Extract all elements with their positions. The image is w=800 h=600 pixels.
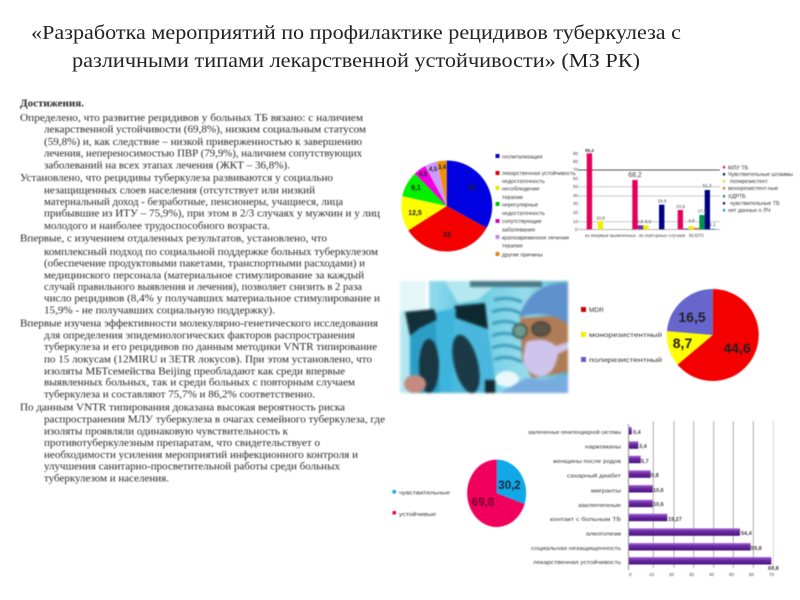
axis ticks: 50 — [729, 572, 735, 577]
paragraph: relapse factors — [20, 113, 366, 171]
bar chart: relapse groups: 10,8 — [596, 216, 605, 220]
bar chart: relapse groups: 10 — [573, 219, 579, 224]
bar chart: relapse groups: 20 — [573, 210, 579, 215]
axis ticks: 30 — [689, 572, 695, 577]
film: left dark band — [405, 309, 438, 336]
paragraph: molecular genetic study: выявленных больных, так и среди больных с повторным случаем — [44, 378, 355, 389]
category labels: социальная незащищенность — [531, 546, 621, 552]
paragraph: molecular genetic study — [20, 319, 378, 400]
text block: achievements — [20, 98, 385, 485]
pie chart: causes: 33 — [443, 232, 451, 239]
photo: doctor examining chest x-ray — [400, 281, 568, 396]
film: center spine — [436, 308, 456, 393]
axis ticks: 60 — [749, 572, 755, 577]
bar chart: relapse groups: 89,4 — [585, 148, 594, 153]
category labels: заключенные пенитенциарной системы — [528, 429, 621, 436]
bar chart: relapse groups: 17,9 — [698, 208, 707, 214]
bar chart: relapse groups: 4,8 — [688, 218, 695, 223]
legend: causes: заболевания — [502, 228, 535, 234]
hand — [404, 375, 426, 393]
legend: resistance types: полирезистентный — [589, 356, 662, 364]
paragraph: relapse factors: Определено, что развитие рецидивов у больных ТБ вязано: с наличием — [20, 113, 363, 124]
paragraph: social groups — [20, 173, 380, 232]
bar chart: relapse groups: из впервые выявленных — [585, 233, 637, 238]
axis ticks: 0 — [629, 572, 632, 577]
paragraph: social support: комплексный подход по социальной поддержке больных туберкулезом — [44, 247, 378, 258]
bars — [629, 427, 771, 564]
left lung — [419, 339, 439, 393]
paragraph: social support: случай правильного выявления и лечения), позволяет снизить в 2 раза — [44, 282, 362, 293]
legend: relapse groups: монорезистент-ные — [728, 186, 778, 192]
doctor face — [520, 315, 568, 378]
value labels: 59,8 — [751, 546, 762, 552]
value labels: 5,7 — [641, 459, 649, 465]
legend: causes: нерегулярные — [502, 202, 538, 208]
legend: causes: другие причины — [502, 252, 543, 258]
pie chart: drug resistance share: 69,8 — [472, 497, 495, 509]
paragraph: social support: Впервые, с изучением отдаленных результатов, установлено, что — [20, 234, 327, 245]
film: side tissue — [410, 320, 440, 393]
bar chart: relapse groups: из повторных случаев — [639, 233, 686, 238]
legend: drug resistance share: устойчивые — [399, 511, 436, 518]
pie chart: causes — [401, 160, 492, 252]
value labels: 0,4 — [633, 430, 642, 436]
bar chart: relapse groups: ВСЕГО — [689, 233, 704, 238]
pie chart: causes: 9,1 — [411, 185, 421, 192]
legend: resistance types — [581, 307, 662, 364]
paragraph: VNTR typing: улучшения санитарно-просветительной работы среди больных — [44, 461, 341, 472]
legend: causes: недостаточность — [502, 179, 545, 185]
pie chart: causes: 3,4 — [438, 165, 447, 171]
paragraph: molecular genetic study: для определения эпидемиологических факторов распространения — [44, 330, 355, 341]
bar chart: relapse groups: 1,1 — [709, 222, 716, 227]
axis ticks: 40 — [709, 572, 715, 577]
title: «Разработка мероприятий по профилактике рецидивов туберкулеза с — [31, 22, 681, 44]
paragraph: relapse factors: лекарственной устойчивости (69,8%), низким социальным статусом — [44, 125, 366, 136]
legend: relapse groups: нет данных о ЛЧ — [728, 208, 771, 214]
value labels — [633, 430, 779, 572]
legend: relapse groups: Чувствительные штаммы — [728, 172, 793, 178]
legend: causes: терапии — [502, 195, 523, 201]
pie chart: causes: 4,5 — [429, 167, 438, 173]
category labels: алкоголизм — [586, 532, 621, 538]
bar chart: relapse groups: 60 — [573, 176, 579, 181]
legend: causes: лекарственная устойчивость — [502, 170, 576, 177]
paragraph: social support: число рецидивов (8,4% у получавших материальное стимулирование и — [44, 294, 380, 305]
paragraph: VNTR typing: изоляты проявляли одинаковую чувствительность к — [44, 427, 289, 438]
pie chart: resistance types: 16,5 — [678, 309, 706, 325]
title: различными типами лекарственной устойчивости» (МЗ РК) — [72, 50, 640, 72]
value labels: 69,8 — [768, 566, 779, 572]
legend: causes: сопутствующие — [502, 219, 542, 225]
paragraph: VNTR typing: туберкулезом и населения. — [44, 474, 169, 485]
paragraph: social support: (обеспечение продуктовыми пакетами, транспортными расходами) и — [44, 259, 365, 270]
pie chart: causes: 4,5 — [419, 172, 428, 178]
pie chart: resistance types: 44,6 — [723, 340, 751, 356]
category labels — [528, 429, 622, 566]
mask — [523, 340, 568, 376]
value labels: 10,6 — [653, 488, 664, 494]
category labels: сахарный диабет — [567, 472, 622, 480]
legend: relapse groups — [723, 166, 793, 214]
legend: causes: госпитализация — [502, 154, 542, 160]
paragraph: social groups: незащищенных слоев населения (отсутствует или низкий — [44, 185, 315, 196]
legend: causes: несоблюдение — [502, 186, 540, 192]
heading: achievements: Достижения. — [20, 98, 84, 110]
legend: drug resistance share: чувствительные — [399, 490, 450, 496]
bar chart: relapse groups: 30 — [573, 201, 579, 206]
paragraph: VNTR typing: распространения МЛУ туберкулеза в очагах семейного туберкулеза, где — [44, 415, 385, 426]
bar chart: relapse groups: 40 — [573, 193, 579, 198]
axis ticks: 10 — [649, 572, 655, 577]
legend: causes: кратковременное лечение — [502, 236, 569, 242]
pie chart: causes: 33 — [468, 185, 476, 192]
back x-ray ribs — [492, 298, 522, 362]
bright light panel — [400, 281, 427, 311]
gown — [500, 376, 568, 393]
paragraph: relapse factors: лечения, непереносимостью ПВР (79,9%), наличием сопутствующих — [44, 149, 363, 160]
bar chart: relapse groups: 5,6 — [645, 219, 652, 224]
paragraph: social groups: Установлено, что рецидивы туберкулеза развиваются у социально — [20, 173, 333, 184]
paragraph: relapse factors: заболеваний на всех этапах лечения (ЖКТ – 36,8%). — [44, 160, 290, 171]
legend: drug resistance share — [392, 490, 450, 518]
pie chart: drug resistance share — [467, 460, 526, 527]
paragraph: molecular genetic study: туберкулеза и его рецидивов по данным методики VNTR типирование — [44, 342, 377, 353]
paragraph: social groups: молодого и наиболее трудоспособного возраста. — [44, 221, 270, 232]
paragraph: VNTR typing: По данным VNTR типирования доказана высокая вероятность риска — [20, 403, 345, 414]
axis ticks: 70 — [769, 572, 775, 577]
legend: causes: недостаточность — [502, 211, 545, 217]
legend: resistance types: монорезистентный — [589, 331, 662, 339]
category labels: контакт с больным ТБ — [550, 517, 621, 523]
category labels: женщины после родов — [553, 459, 621, 465]
bar chart: relapse groups: 68,2 — [628, 172, 642, 179]
legend: relapse groups: МЛУ ТБ — [728, 166, 749, 172]
paragraph: social support: медицинского персонала (материальное стимулирование за каждый — [44, 270, 364, 281]
bar chart: relapse groups: 90 — [573, 151, 579, 156]
bar chart: relapse groups: 51,3 — [703, 183, 712, 188]
bar chart: relapse groups: 50 — [573, 184, 579, 189]
title — [31, 22, 681, 72]
paragraph: social support: 15,9% - не получавших социальную поддержку). — [44, 305, 275, 316]
bar chart: relapse groups: 5,6 — [637, 219, 644, 224]
legend: relapse groups: ХДРТБ — [728, 194, 746, 200]
paragraph: social groups: материальный доход - безработные, пенсионеры, учащиеся, лица — [44, 197, 343, 208]
film: right dark band — [454, 303, 488, 329]
right lung — [447, 332, 485, 396]
bar chart: relapse groups: 0 — [575, 227, 578, 232]
bar chart: relapse groups: 70 — [573, 167, 579, 172]
pie chart: resistance types: 8,7 — [673, 335, 692, 351]
value labels: 19,27 — [668, 517, 682, 523]
paragraph: VNTR typing: противотуберкулезным препаратам, что свидетельствует о — [44, 438, 320, 449]
legend: resistance types: MDR — [589, 307, 604, 314]
legend: causes — [496, 154, 576, 258]
bar chart: relapse groups: 80 — [573, 159, 579, 164]
bar chart: relapse groups — [573, 148, 720, 238]
paragraph: VNTR typing — [20, 403, 385, 485]
axis ticks — [629, 572, 775, 577]
paragraph: molecular genetic study: туберкулеза и составляют 75,7% и 86,2% соответственно. — [44, 389, 315, 400]
category labels: мигранты — [591, 488, 621, 494]
paragraph: VNTR typing: необходимости усиления мероприятий инфекционного контроля и — [44, 450, 358, 461]
paragraph: social support — [20, 234, 380, 316]
value labels: 54,4 — [741, 531, 753, 537]
paragraph: social groups: прибывшие из ИТУ – 75,9%), при этом в 2/3 случаях у мужчин и у лиц — [44, 209, 380, 220]
bar chart: relapse groups: 23,9 — [676, 204, 685, 209]
paragraph: molecular genetic study: по 15 локусам (12MIRU и 3ETR локусов). При этом установлено, что — [44, 354, 372, 365]
paragraph: molecular genetic study: Впервые изучена эффективности молекулярно-генетического исследования — [20, 319, 378, 330]
surgical cap — [519, 284, 568, 324]
category labels: лекарственная устойчивость — [533, 559, 621, 566]
pie chart: resistance types — [667, 289, 759, 381]
horizontal bar chart: risk factors — [528, 421, 779, 577]
value labels: 3,4 — [639, 444, 648, 450]
legend: relapse groups: чувствительные ТБ — [730, 201, 780, 207]
category labels: наркоманы — [585, 444, 621, 450]
legend: causes: терапия — [502, 244, 523, 250]
axis ticks: 20 — [669, 572, 675, 577]
value labels: 10,6 — [653, 502, 664, 508]
value labels: 9,8 — [651, 473, 659, 479]
paragraph: relapse factors: (59,8%) и, как следствие – низкой приверженностью к завершению — [44, 137, 362, 148]
bar chart: relapse groups: 29,9 — [658, 198, 667, 204]
glasses — [513, 324, 527, 338]
category labels: заключенные — [578, 503, 621, 509]
legend: relapse groups: полирезистент — [730, 179, 768, 185]
paragraph: molecular genetic study: изоляты МБТсемейства Beijing преобладают как среди впервые — [44, 366, 345, 377]
pie chart: drug resistance share: 30,2 — [498, 480, 521, 492]
pie chart: causes: 12,5 — [408, 210, 422, 217]
